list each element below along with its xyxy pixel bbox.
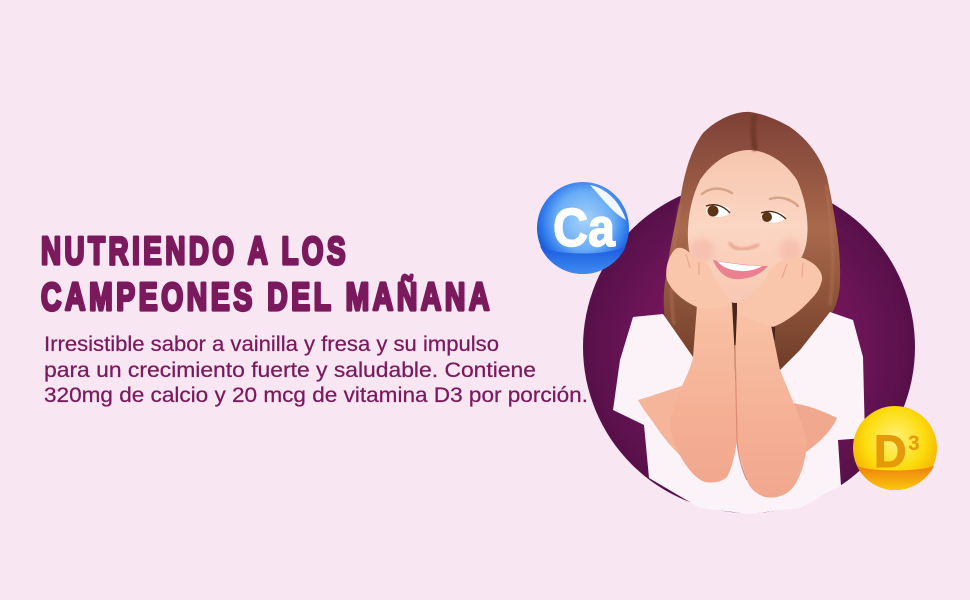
- heading: CAMPEONES DEL MAÑANA: [41, 275, 493, 319]
- girl illustration: [613, 112, 865, 514]
- left upper arm: [638, 386, 700, 470]
- teeth: [717, 261, 762, 271]
- mouth: [713, 260, 768, 279]
- purple circle backdrop: [583, 181, 915, 513]
- badge lower liquid: [540, 246, 626, 274]
- badge superscript: 3: [908, 432, 920, 455]
- left arm: [670, 303, 737, 482]
- eye: right: [761, 211, 786, 222]
- right arm: [735, 312, 807, 498]
- heading: NUTRIENDO A LOS: [41, 230, 349, 273]
- eye: left: [706, 205, 730, 217]
- cheek blush: [690, 238, 801, 262]
- badge glare: [590, 185, 626, 220]
- shirt: [613, 312, 865, 514]
- right upper arm: [790, 403, 837, 452]
- eyebrows: [702, 189, 798, 206]
- vitamin D3 badge: [853, 406, 937, 490]
- neck shadow: [722, 290, 775, 345]
- right fist: [737, 257, 822, 327]
- badge lower liquid: [857, 466, 934, 490]
- nose: [730, 243, 758, 249]
- calcium badge: [537, 182, 629, 274]
- face: [688, 150, 808, 303]
- hair strands: [672, 185, 833, 325]
- finger lines: [686, 254, 803, 278]
- body text: [44, 333, 588, 407]
- forearm divide: [735, 345, 747, 480]
- left fist: [666, 248, 732, 309]
- badge label: D: [874, 426, 906, 477]
- hair parting: [751, 114, 758, 151]
- body text: Irresistible sabor a vainilla y fresa y su impulso: [44, 333, 499, 356]
- hair: [664, 112, 840, 372]
- body text: para un crecimiento fuerte y saludable. Contiene: [44, 359, 536, 382]
- body text: 320mg de calcio y 20 mcg de vitamina D3 por porción.: [44, 384, 588, 407]
- heading: [41, 230, 493, 319]
- badge label: Ca: [553, 198, 616, 258]
